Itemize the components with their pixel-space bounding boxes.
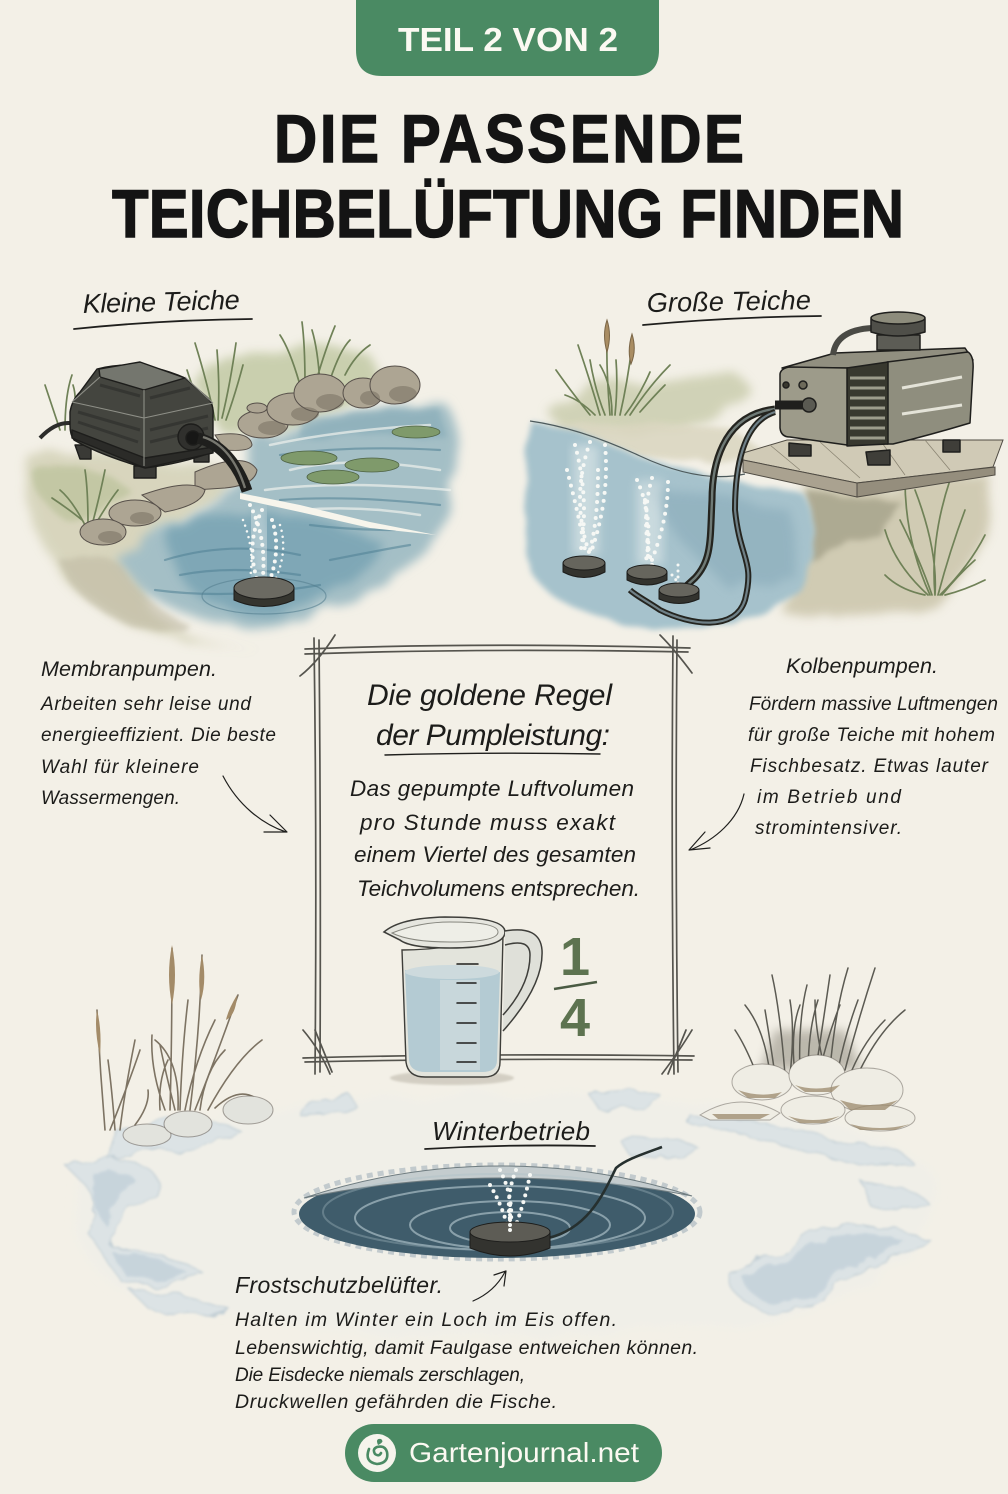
text block: Kolbenpumpen <box>748 654 998 839</box>
bubbles <box>254 510 264 580</box>
air hose <box>548 1147 662 1238</box>
rule box text: pro Stunde muss exakt <box>359 810 617 835</box>
plants <box>45 322 370 525</box>
air pump <box>70 362 213 478</box>
text block: Membranpumpen: energieeffizient. Die beste <box>41 725 276 746</box>
white shoreline streak <box>240 493 436 535</box>
arrow: text to aerator <box>473 1271 506 1301</box>
text block: Kolbenpumpen: für große Teiche mit hohem <box>748 725 995 746</box>
arrow: left text to rule box <box>223 776 287 832</box>
rule box: sketched frame <box>300 635 694 1074</box>
reeds <box>556 330 670 415</box>
heading: Kleine Teiche: Kleine Teiche <box>82 285 240 319</box>
diffuser stones <box>563 556 699 604</box>
text block: Membranpumpen: Wassermengen. <box>41 788 180 809</box>
badge: Teil 2 von 2 <box>356 0 659 76</box>
badge: Teil 2 von 2: TEIL 2 VON 2 <box>398 21 618 58</box>
pond water <box>118 405 460 625</box>
soil <box>780 470 987 618</box>
bubbles <box>499 1175 521 1228</box>
text block: Frostschutzbelüfter: Halten im Winter ein Loch im Eis offen. <box>235 1309 617 1331</box>
arrow: right text to rule box <box>689 794 744 850</box>
text block: Frostschutzbelüfter <box>235 1272 698 1413</box>
rule box heading <box>367 679 613 755</box>
icon: measuring jug <box>384 917 542 1085</box>
title: DIE PASSENDE <box>274 100 744 177</box>
pump <box>780 312 973 465</box>
blue ice patches <box>65 1090 930 1315</box>
cable <box>40 423 70 438</box>
rule box heading: der Pumpleistung: <box>376 719 610 752</box>
heading: Große Teiche: Große Teiche <box>647 285 811 318</box>
text block: Membranpumpen <box>40 657 276 809</box>
fraction: one quarter: 4 <box>560 988 590 1048</box>
footer brand pill: Gartenjournal.net <box>409 1437 639 1468</box>
rule box text: Das gepumpte Luftvolumen <box>350 776 634 801</box>
illustration: large pond with piston pump <box>525 312 1003 629</box>
shore mud lower left <box>60 554 190 631</box>
heading: Kleine Teiche <box>74 285 252 329</box>
rule box text: einem Viertel des gesamten <box>354 842 636 867</box>
text block: Kolbenpumpen: im Betrieb und <box>757 787 902 808</box>
title: TEICHBELÜFTUNG FINDEN <box>112 175 904 252</box>
fraction: one quarter: 1 <box>560 927 590 987</box>
text block: Frostschutzbelüfter: Lebenswichtig, damit Faulgase entweichen können. <box>235 1337 698 1359</box>
text block: Membranpumpen: Wahl für kleinere <box>41 757 199 778</box>
text block: Membranpumpen: Arbeiten sehr leise und <box>40 694 252 715</box>
far bank wash <box>550 373 750 435</box>
land wash <box>27 449 270 650</box>
fraction: one quarter <box>554 927 597 1048</box>
bubble columns <box>586 445 650 565</box>
text block: Frostschutzbelüfter: Druckwellen gefährden die Fische. <box>235 1391 557 1413</box>
rule box text: Teichvolumens entsprechen. <box>357 876 640 901</box>
heading: Winterbetrieb: Winterbetrieb <box>432 1116 590 1146</box>
footer brand pill <box>345 1424 662 1482</box>
text block: Kolbenpumpen: Kolbenpumpen. <box>786 654 938 678</box>
left reeds <box>97 948 265 1130</box>
text block: Frostschutzbelüfter: Die Eisdecke niemals zerschlagen, <box>235 1365 525 1386</box>
text block: Kolbenpumpen: stromintensiver. <box>755 818 902 839</box>
right reeds <box>760 1030 862 1070</box>
illustration: winter pond with frost-free aerator <box>65 945 934 1335</box>
text block: Membranpumpen: Membranpumpen. <box>41 657 217 681</box>
hoses <box>630 405 803 623</box>
icon: brand logo <box>358 1434 396 1472</box>
lily pads <box>281 426 440 484</box>
illustration: small pond with membrane pump <box>27 322 460 650</box>
diffuser <box>470 1232 550 1256</box>
text block: Kolbenpumpen: Fördern massive Luftmengen <box>749 694 998 715</box>
pond water <box>525 420 812 629</box>
text block: Frostschutzbelüfter: Frostschutzbelüfter. <box>235 1272 443 1298</box>
diffuser stone <box>234 588 294 606</box>
outlet hose <box>198 438 247 491</box>
rule box heading: Die goldene Regel <box>367 679 613 712</box>
text block: Kolbenpumpen: Fischbesatz. Etwas lauter <box>750 756 989 777</box>
snowy rocks <box>700 1055 915 1131</box>
back stones <box>80 366 420 545</box>
rule box text <box>350 776 640 901</box>
slab <box>743 440 1003 483</box>
hole in ice <box>294 1165 700 1259</box>
title <box>112 100 904 252</box>
ice sheet <box>73 1094 934 1335</box>
right grass <box>885 480 985 595</box>
